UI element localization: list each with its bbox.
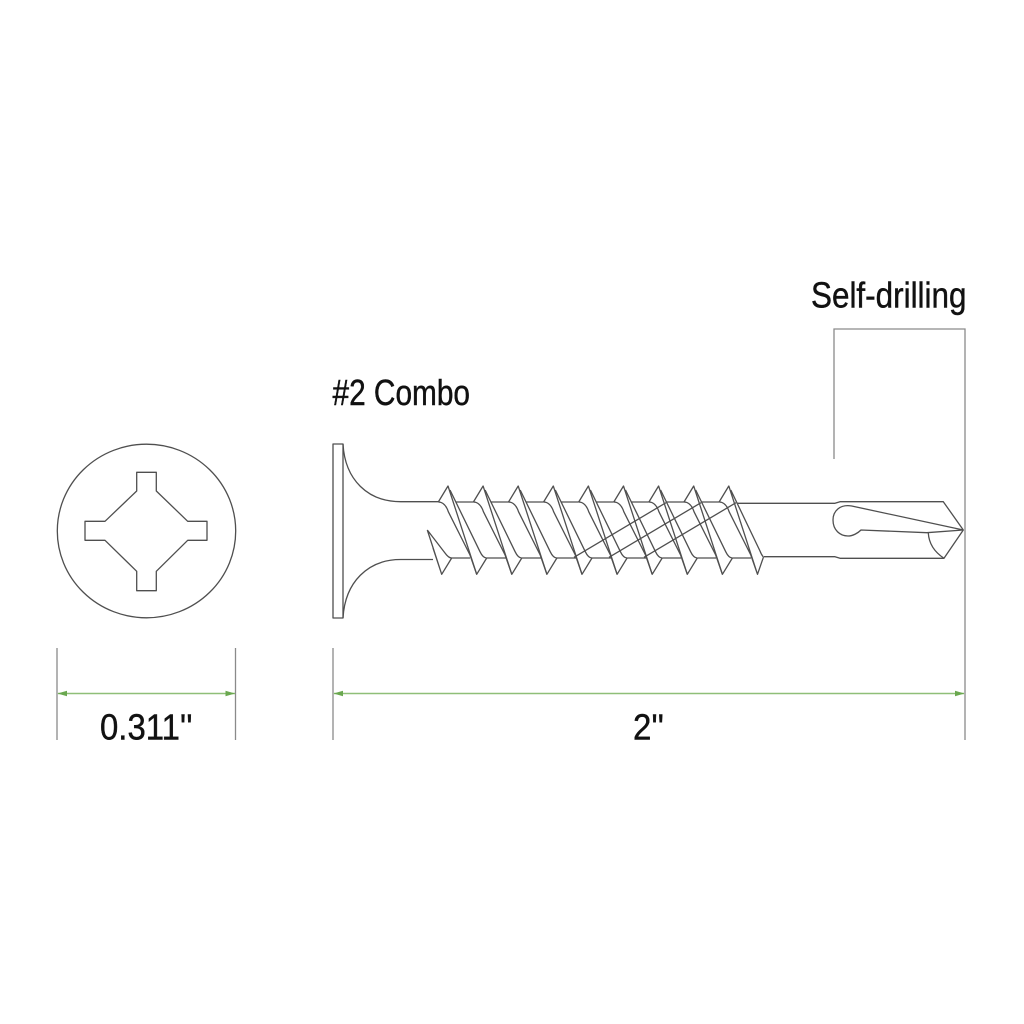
label: #2 combo: #2 Combo: [332, 372, 470, 413]
screw head view: [57, 444, 236, 618]
icon: #2 combo drive recess: [85, 472, 207, 591]
head outline circle: [57, 444, 236, 618]
label: self-drilling: Self-drilling: [811, 274, 966, 316]
partial thread start: [427, 530, 470, 574]
label: 2 inch: 2'': [633, 706, 664, 748]
screw side view: [333, 444, 963, 618]
dimension: head diameter: [57, 648, 236, 748]
leader: self-drilling callout bracket: [834, 329, 965, 740]
screw head flange: [333, 444, 343, 618]
last thread turn: [719, 486, 764, 574]
dimension: overall length: [333, 648, 964, 748]
drill point shank: [737, 502, 963, 558]
front thread turns: [438, 486, 764, 574]
underhead bugle curves and shank: [343, 444, 438, 618]
drill flute: [833, 506, 963, 558]
root lines between threads: [487, 557, 751, 559]
rear thread diagonals: [574, 503, 736, 557]
label: 0.311 inch: 0.311'': [100, 706, 192, 748]
